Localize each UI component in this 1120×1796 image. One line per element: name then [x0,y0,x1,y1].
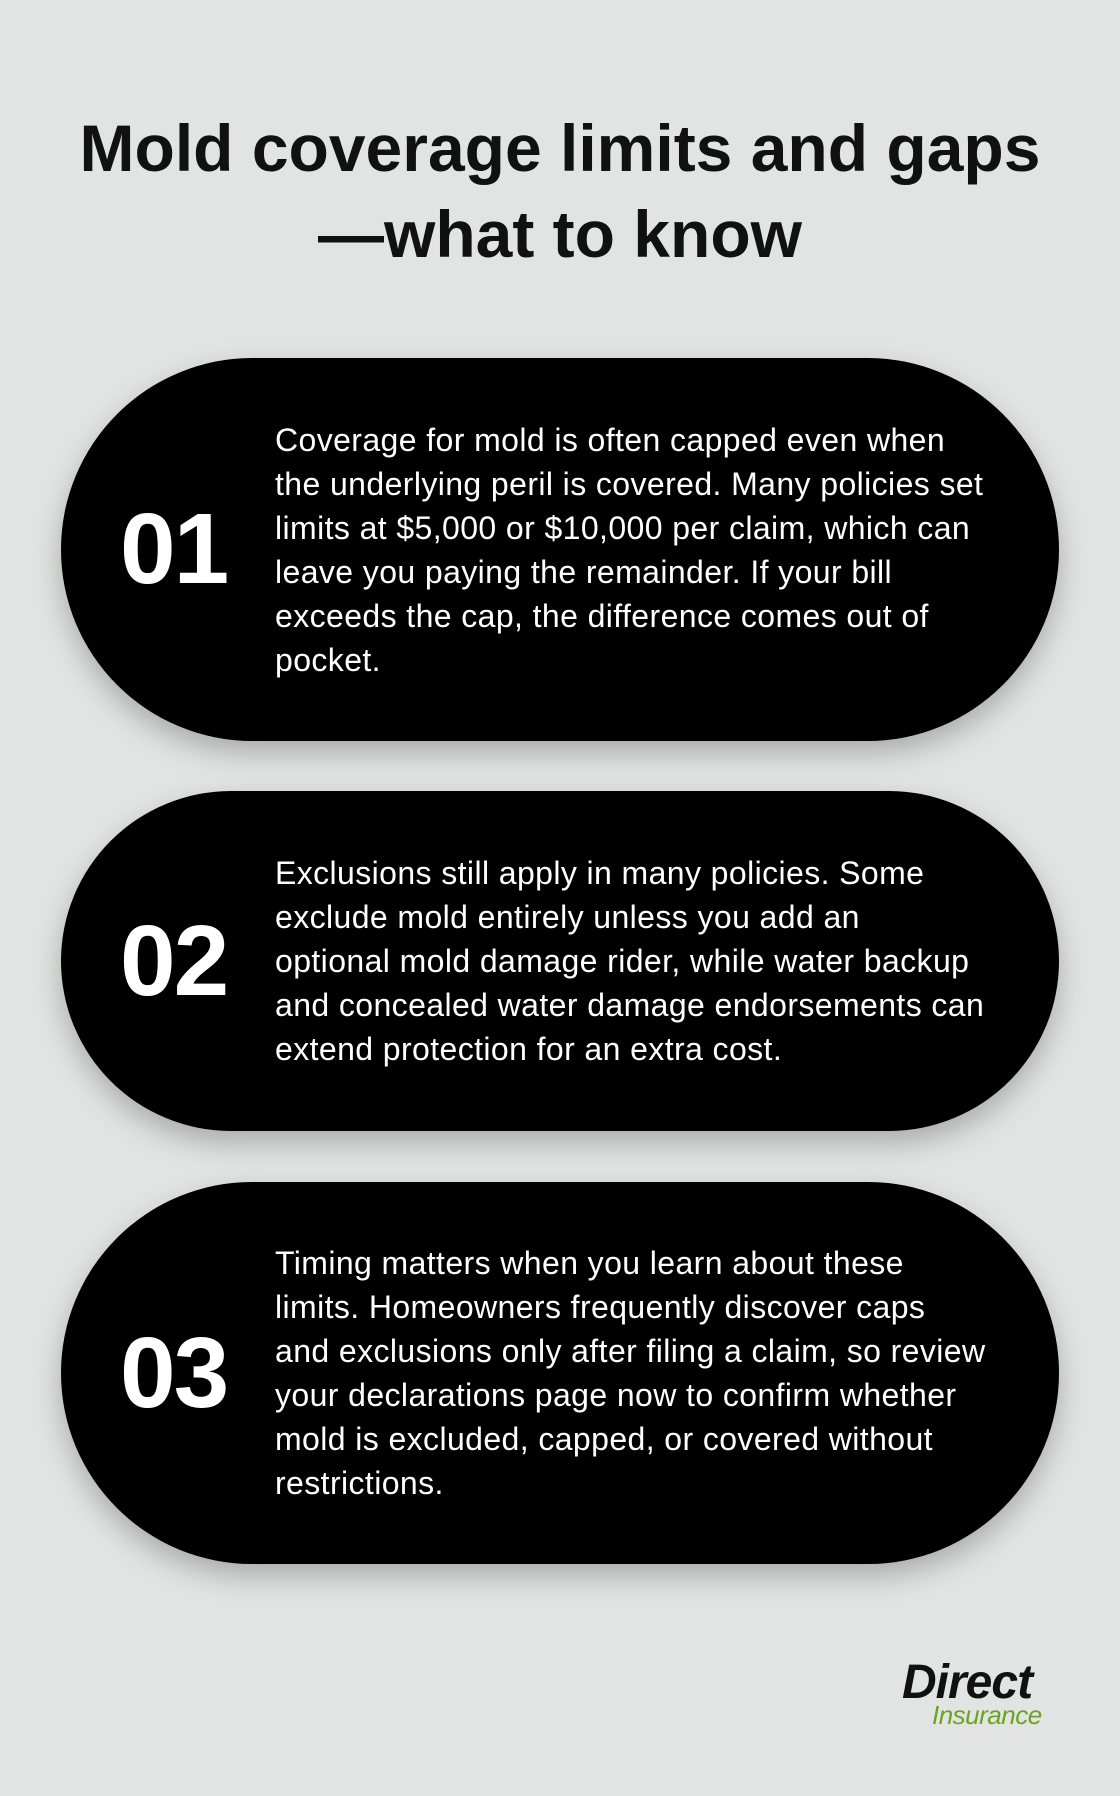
number 01: 01 [120,493,227,605]
text 02: and concealed water damage endorsements can [275,987,984,1023]
text 01 [275,422,983,678]
panel: 03 [61,1182,1059,1564]
text 02 [275,855,984,1067]
text 01: Coverage for mold is often capped even when [275,422,945,458]
text 02: Exclusions still apply in many policies. Some [275,855,924,891]
text 02: optional mold damage rider, while water backup [275,943,969,979]
text 03: Timing matters when you learn about these [275,1245,904,1281]
text 03 [275,1245,986,1501]
text 01: exceeds the cap, the difference comes out of [275,598,929,634]
title [80,111,1040,271]
text 01: pocket. [275,642,381,678]
number 02: 02 [120,904,227,1016]
text 03: restrictions. [275,1465,444,1501]
text 03: mold is excluded, capped, or covered without [275,1421,933,1457]
title: Mold coverage limits and gaps [80,111,1040,185]
text 01: the underlying peril is covered. Many policies set [275,466,983,502]
text 02: extend protection for an extra cost. [275,1031,782,1067]
text 03: limits. Homeowners frequently discover caps [275,1289,925,1325]
panel: 02 [61,791,1059,1131]
logo: Insurance [932,1700,1042,1730]
title: —what to know [318,197,802,271]
text 01: leave you paying the remainder. If your bill [275,554,892,590]
text 01: limits at $5,000 or $10,000 per claim, which can [275,510,970,546]
text 02: exclude mold entirely unless you add an [275,899,860,935]
logo: Direct [902,1656,1032,1709]
logo [902,1656,1042,1730]
text 03: and exclusions only after filing a claim, so review [275,1333,986,1369]
panel: 01 [61,358,1059,741]
number 03: 03 [120,1316,227,1428]
text 03: your declarations page now to confirm whether [275,1377,956,1413]
